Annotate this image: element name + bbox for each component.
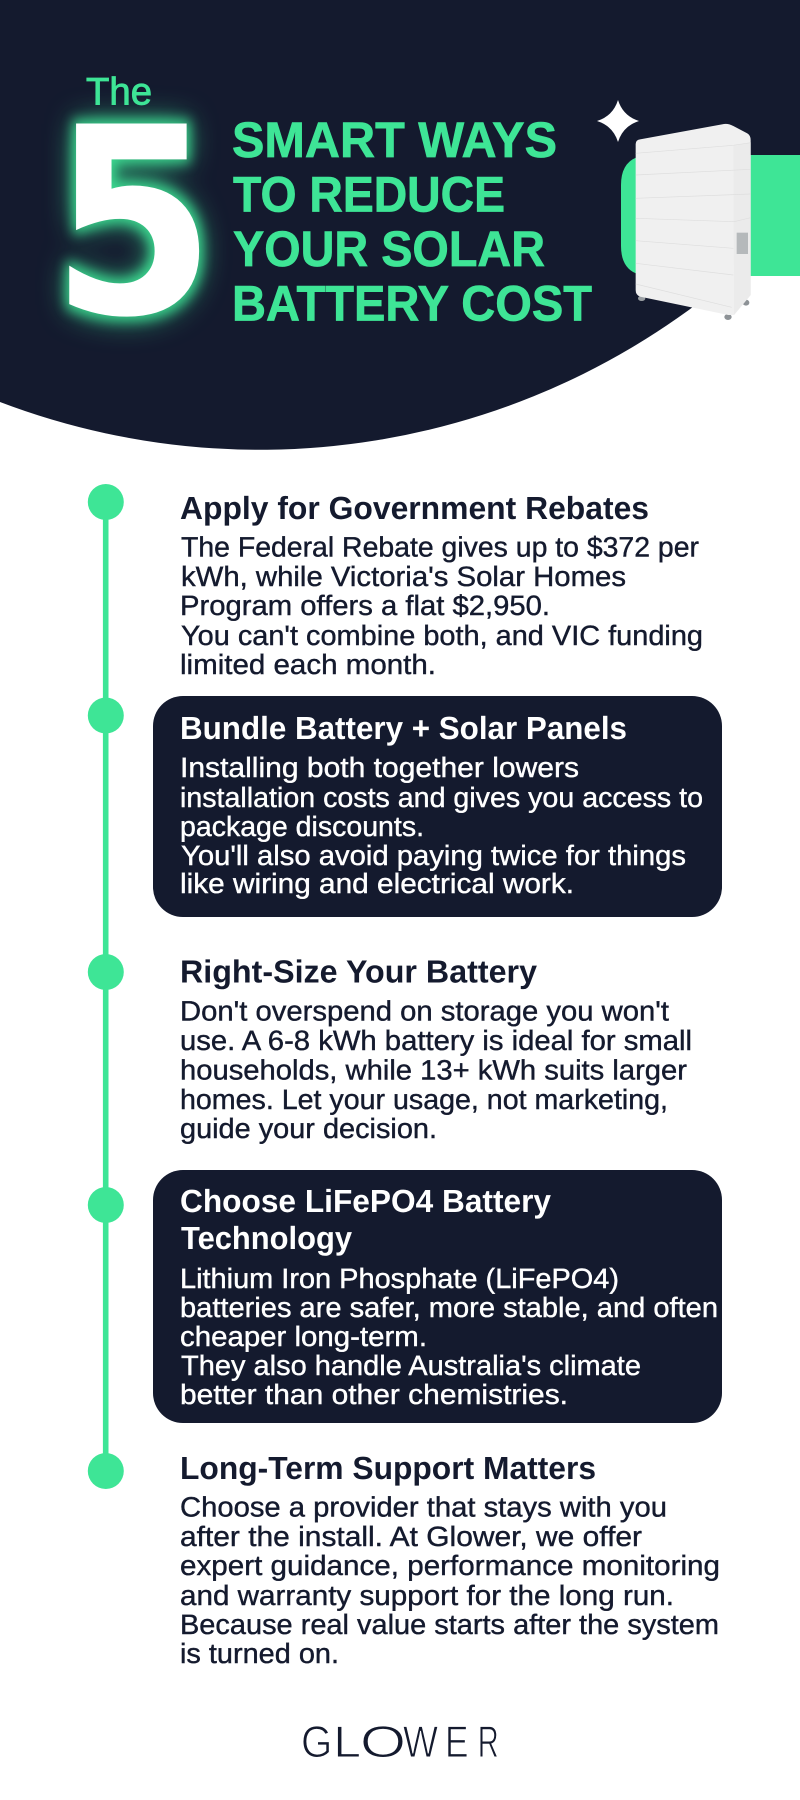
panel: step 2 bundle: package discounts. (180, 811, 424, 842)
panel: step 5 long-term support: expert guidance, performance monitoring (180, 1550, 720, 1581)
panel: step 3 right-size: Don't overspend on storage you won't (180, 996, 669, 1027)
panel: step 1 government rebates (180, 490, 703, 680)
heading: YOUR SOLAR (233, 221, 545, 277)
logo: GLOWER: R (478, 1718, 499, 1767)
panel: step 2 bundle: like wiring and electrical work. (180, 868, 574, 899)
green accent block (621, 155, 800, 276)
battery illustration (636, 124, 751, 320)
panel: step 3 right-size: use. A 6-8 kWh battery is ideal for small (180, 1025, 692, 1056)
panel: step 4 LiFePO4: Lithium Iron Phosphate (LiFePO4) (180, 1263, 619, 1294)
timeline dot 5 (88, 1453, 124, 1489)
panel: step 5 long-term support: Choose a provider that stays with you (180, 1492, 667, 1523)
panel: step 1 government rebates: Program offers a flat $2,950. (180, 590, 550, 621)
heading (232, 112, 592, 332)
heading: TO REDUCE (233, 167, 505, 223)
panel: step 1 government rebates: You can't combine both, and VIC funding (181, 620, 703, 651)
panel: step 5 long-term support: is turned on. (180, 1638, 339, 1669)
timeline dot 2 (88, 698, 124, 734)
header background (0, 0, 800, 450)
heading: BATTERY COST (232, 276, 592, 332)
panel: step 4 LiFePO4: They also handle Australia's climate (181, 1350, 641, 1381)
panel: step 5 long-term support: Because real value starts after the system (180, 1609, 719, 1640)
panel: step 1 government rebates: Apply for Government Rebates (180, 490, 649, 526)
panel: step 5 long-term support: Long-Term Support Matters (180, 1450, 596, 1486)
timeline dot 1 (88, 484, 124, 520)
logo: GLOWER (301, 1718, 499, 1767)
panel: step 5 long-term support: after the install. At Glower, we offer (180, 1521, 642, 1552)
panel: step 4 LiFePO4 (153, 1170, 722, 1423)
big number 5: 5 (51, 73, 216, 375)
heading: SMART WAYS (232, 112, 557, 168)
title (51, 70, 592, 375)
logo: GLOWER: W (403, 1718, 438, 1767)
logo: GLOWER: O (360, 1718, 406, 1767)
panel: step 3 right-size: households, while 13+ kWh suits larger (180, 1055, 687, 1086)
panel: step 5 long-term support: and warranty support for the long run. (180, 1580, 674, 1611)
panel: step 1 government rebates: limited each month. (180, 649, 436, 680)
panel: step 3 right-size (180, 954, 692, 1144)
logo: GLOWER: G (301, 1718, 332, 1767)
panel: step 4 LiFePO4: batteries are safer, more stable, and often (180, 1292, 718, 1323)
panel: step 2 bundle: Bundle Battery + Solar Panels (180, 710, 627, 746)
panel: step 4 LiFePO4: cheaper long-term. (180, 1321, 427, 1352)
timeline dot 4 (88, 1187, 124, 1223)
The: The (86, 70, 152, 113)
logo: GLOWER: E (445, 1718, 468, 1767)
panel: step 2 bundle: Installing both together lowers (180, 752, 579, 783)
panel: step 2 bundle: installation costs and gives you access to (180, 782, 703, 813)
icon: sparkle star (597, 100, 639, 142)
panel: step 5 long-term support (180, 1450, 720, 1669)
timeline (88, 484, 124, 1489)
panel: step 2 bundle: You'll also avoid paying twice for things (181, 840, 686, 871)
logo: GLOWER: L (333, 1718, 361, 1767)
panel: step 3 right-size: Right-Size Your Battery (180, 954, 537, 990)
panel: step 4 LiFePO4: better than other chemistries. (180, 1379, 568, 1410)
panel: step 1 government rebates: The Federal Rebate gives up to $372 per (181, 532, 699, 563)
panel: step 4 LiFePO4: Technology (181, 1220, 352, 1256)
panel: step 1 government rebates: kWh, while Victoria's Solar Homes (181, 561, 626, 592)
panel: step 3 right-size: guide your decision. (180, 1113, 437, 1144)
panel: step 4 LiFePO4: Choose LiFePO4 Battery (180, 1183, 551, 1219)
panel: step 3 right-size: homes. Let your usage, not marketing, (180, 1084, 668, 1115)
panel: step 2 bundle (153, 696, 722, 917)
timeline dot 3 (88, 954, 124, 990)
